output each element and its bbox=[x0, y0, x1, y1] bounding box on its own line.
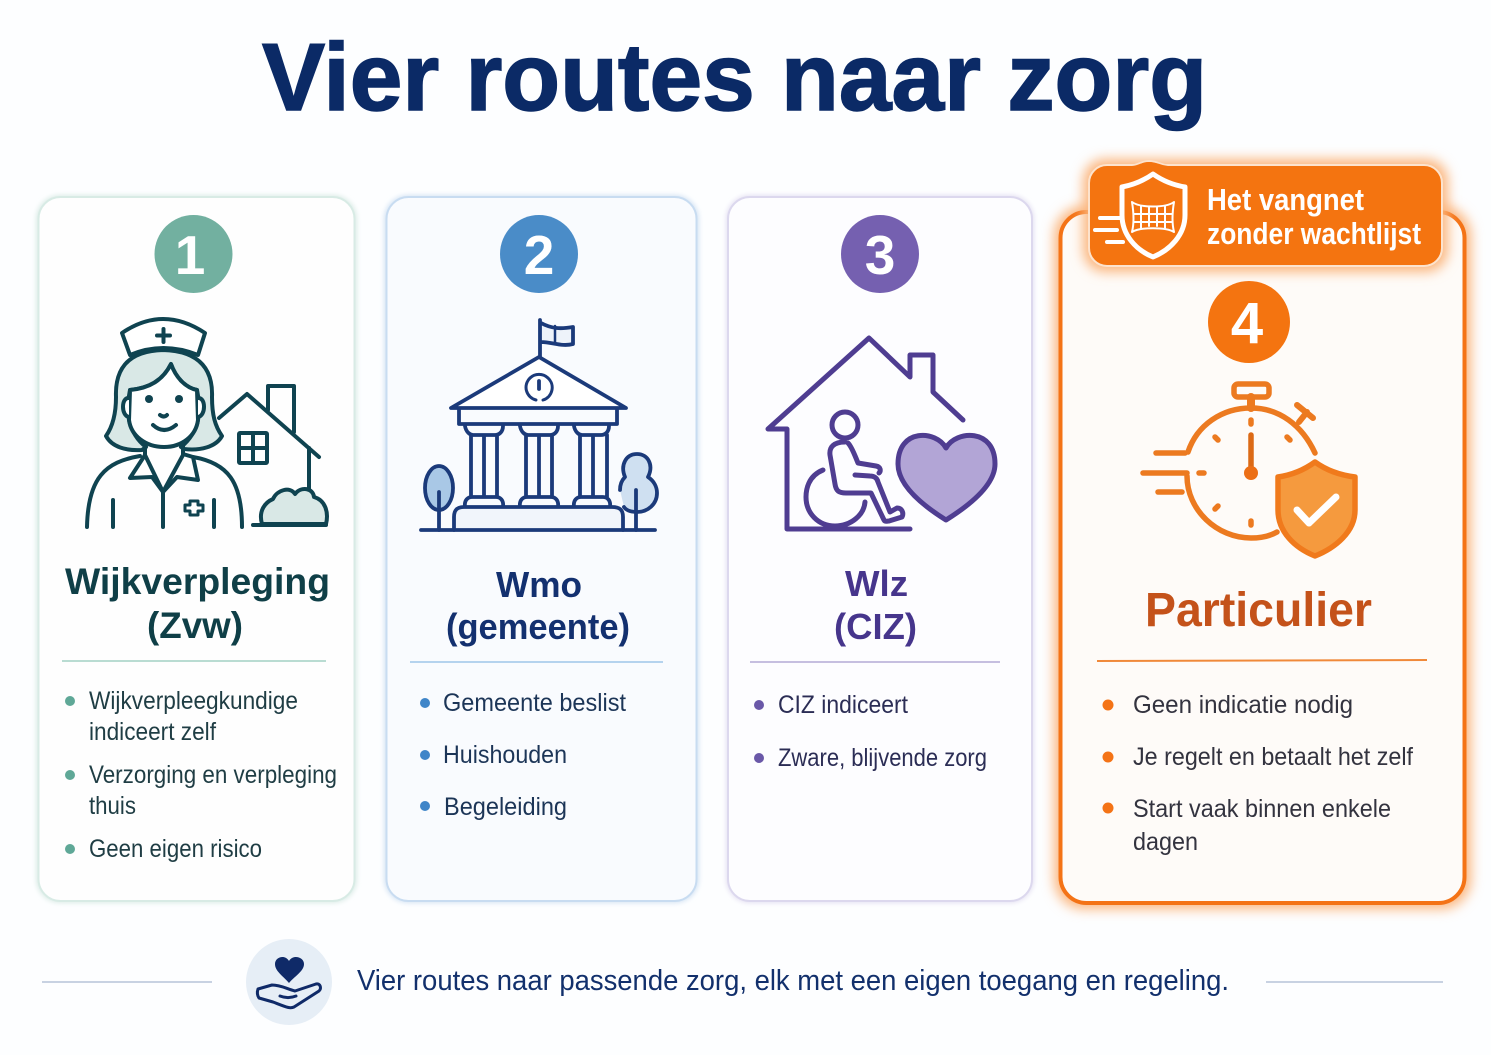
bullet list: Zware, blijvende zorg bbox=[778, 744, 987, 772]
bullet list bbox=[754, 691, 987, 772]
heading bbox=[65, 561, 330, 646]
panel: route 3 Wlz bbox=[726, 195, 1034, 903]
bullet list: Je regelt en betaalt het zelf bbox=[1133, 743, 1413, 771]
heading: (gemeente) bbox=[446, 606, 630, 647]
number badge 4 bbox=[1208, 281, 1290, 363]
badge text: Het vangnet bbox=[1207, 182, 1364, 217]
number badge 1: 1 bbox=[175, 224, 205, 286]
panel: route 1 Wijkverpleging bbox=[36, 195, 357, 903]
icon: house, wheelchair and heart bbox=[768, 338, 995, 529]
bullet list bbox=[1102, 691, 1413, 856]
bullet list: Geen eigen risico bbox=[89, 835, 262, 863]
heading bbox=[446, 564, 630, 647]
bullet list: Wijkverpleegkundige bbox=[89, 687, 298, 715]
footer text: Vier routes naar passende zorg, elk met een eigen toegang en regeling. bbox=[357, 965, 1229, 997]
icon: shield with net bbox=[1095, 174, 1185, 257]
bullet list: indiceert zelf bbox=[89, 718, 216, 746]
heading: (CIZ) bbox=[834, 606, 917, 647]
bullet list: dagen bbox=[1133, 828, 1198, 856]
bullet list: Geen indicatie nodig bbox=[1133, 691, 1353, 719]
icon: nurse and house bbox=[87, 319, 327, 527]
icon: heart in hand bbox=[246, 939, 332, 1025]
panel: route 4 Particulier bbox=[1054, 159, 1471, 909]
number badge 3 bbox=[841, 215, 919, 293]
heading: Wlz bbox=[845, 563, 908, 604]
number badge 1 bbox=[154, 215, 232, 293]
heading: Particulier bbox=[1145, 584, 1372, 637]
bullet list: Verzorging en verpleging bbox=[89, 761, 337, 789]
bullet list: Start vaak binnen enkele bbox=[1133, 795, 1391, 823]
number badge 3: 3 bbox=[865, 224, 895, 286]
heading: Wmo bbox=[496, 564, 582, 605]
panel: route 2 Wmo bbox=[384, 195, 699, 903]
icon: stopwatch with shield bbox=[1143, 384, 1355, 556]
number badge 2 bbox=[500, 215, 578, 293]
heading bbox=[834, 563, 917, 647]
bullet list: Gemeente beslist bbox=[443, 689, 626, 717]
bullet list: CIZ indiceert bbox=[778, 691, 908, 719]
callout: safety net badge bbox=[1083, 159, 1448, 272]
title: Vier routes naar zorg bbox=[262, 24, 1207, 131]
heading: (Zvw) bbox=[147, 605, 243, 646]
bullet list bbox=[65, 687, 337, 863]
bullet list: Huishouden bbox=[443, 741, 567, 769]
badge text: zonder wachtlijst bbox=[1207, 216, 1421, 251]
number badge 4: 4 bbox=[1231, 291, 1263, 356]
bullet list: thuis bbox=[89, 792, 136, 820]
icon: municipal building bbox=[421, 320, 657, 530]
bullet list bbox=[420, 689, 626, 821]
bullet list: Begeleiding bbox=[444, 793, 567, 821]
badge text bbox=[1207, 182, 1421, 251]
number badge 2: 2 bbox=[524, 224, 554, 286]
heading: Wijkverpleging bbox=[65, 561, 330, 602]
